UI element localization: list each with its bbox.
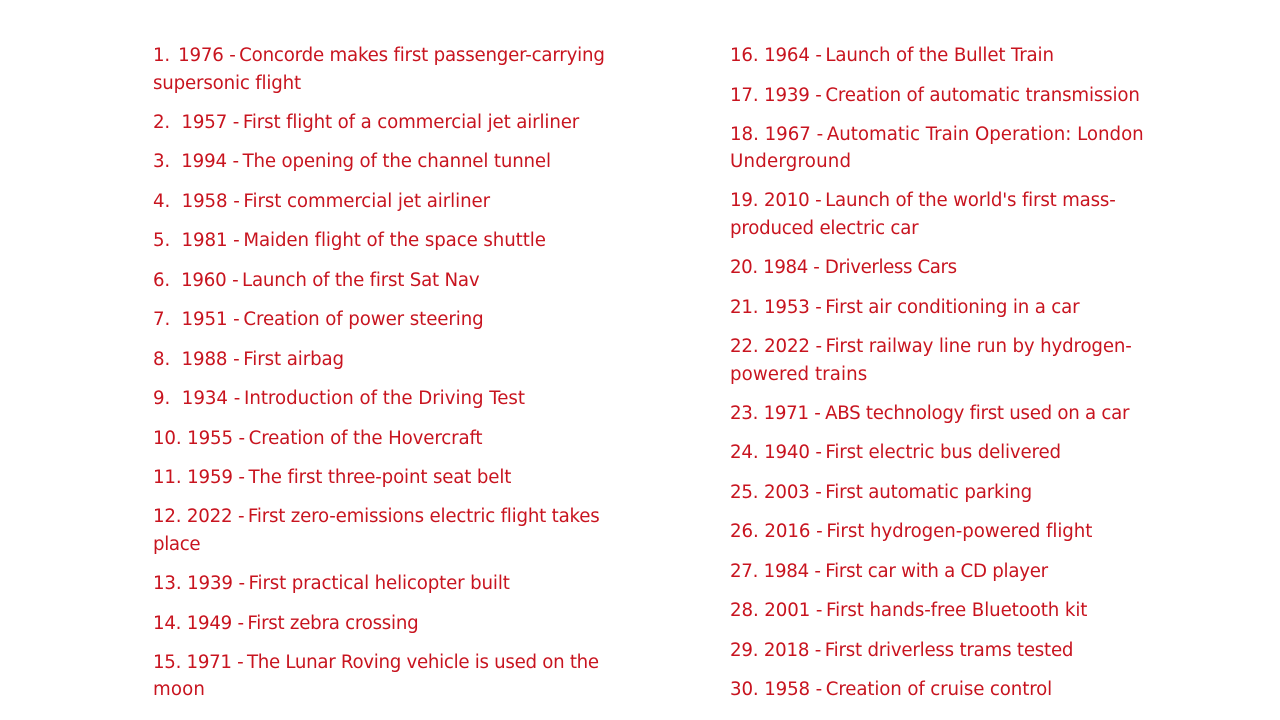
- item 15: moon: [153, 679, 205, 700]
- item 18: Underground: [730, 151, 851, 172]
- item 16: 16. 1964 - Launch of the Bullet Train: [730, 45, 1054, 66]
- item 15: 15. 1971 - The Lunar Roving vehicle is used on the: [153, 652, 599, 673]
- item 18: [730, 124, 1144, 172]
- item 28: 28. 2001 - First hands-free Bluetooth kit: [730, 600, 1087, 621]
- item 4: 4. 1958 - First commercial jet airliner: [153, 191, 490, 212]
- item 30: 30. 1958 - Creation of cruise control: [730, 679, 1052, 700]
- item 23: 23. 1971 - ABS technology first used on a car: [730, 403, 1129, 424]
- item 2: 2. 1957 - First flight of a commercial jet airliner: [153, 112, 579, 133]
- item 12: [153, 506, 600, 555]
- item 1: supersonic flight: [153, 73, 301, 94]
- item 7: 7. 1951 - Creation of power steering: [153, 309, 484, 330]
- item 29: 29. 2018 - First driverless trams tested: [730, 640, 1073, 661]
- item 27: 27. 1984 - First car with a CD player: [730, 561, 1048, 582]
- item 18: 18. 1967 - Automatic Train Operation: London: [730, 124, 1144, 145]
- item 13: 13. 1939 - First practical helicopter built: [153, 573, 510, 594]
- item 25: 25. 2003 - First automatic parking: [730, 482, 1032, 503]
- item 8: 8. 1988 - First airbag: [153, 349, 344, 370]
- item 1: [153, 45, 605, 94]
- item 15: [153, 652, 599, 700]
- item 26: 26. 2016 - First hydrogen-powered flight: [730, 521, 1092, 542]
- item 1: 1. 1976 - Concorde makes first passenger-carrying: [153, 45, 605, 66]
- item 6: 6. 1960 - Launch of the first Sat Nav: [153, 270, 479, 291]
- item 24: 24. 1940 - First electric bus delivered: [730, 442, 1061, 463]
- panel: right column list: [730, 45, 1144, 700]
- item 17: 17. 1939 - Creation of automatic transmission: [730, 85, 1140, 106]
- item 20: 20. 1984 - Driverless Cars: [730, 257, 957, 278]
- item 10: 10. 1955 - Creation of the Hovercraft: [153, 428, 482, 449]
- item 22: [730, 336, 1132, 385]
- item 19: [730, 190, 1116, 239]
- item 19: 19. 2010 - Launch of the world's first mass-: [730, 190, 1116, 211]
- item 12: 12. 2022 - First zero-emissions electric flight takes: [153, 506, 600, 527]
- item 3: 3. 1994 - The opening of the channel tunnel: [153, 151, 551, 172]
- item 12: place: [153, 534, 200, 555]
- item 9: 9. 1934 - Introduction of the Driving Test: [153, 388, 525, 409]
- item 14: 14. 1949 - First zebra crossing: [153, 613, 418, 634]
- item 19: produced electric car: [730, 218, 918, 239]
- item 11: 11. 1959 - The first three-point seat belt: [153, 467, 511, 488]
- item 22: 22. 2022 - First railway line run by hydrogen-: [730, 336, 1132, 357]
- item 22: powered trains: [730, 364, 867, 385]
- panel: left column list: [153, 45, 605, 700]
- item 21: 21. 1953 - First air conditioning in a car: [730, 297, 1079, 318]
- item 5: 5. 1981 - Maiden flight of the space shuttle: [153, 230, 546, 251]
